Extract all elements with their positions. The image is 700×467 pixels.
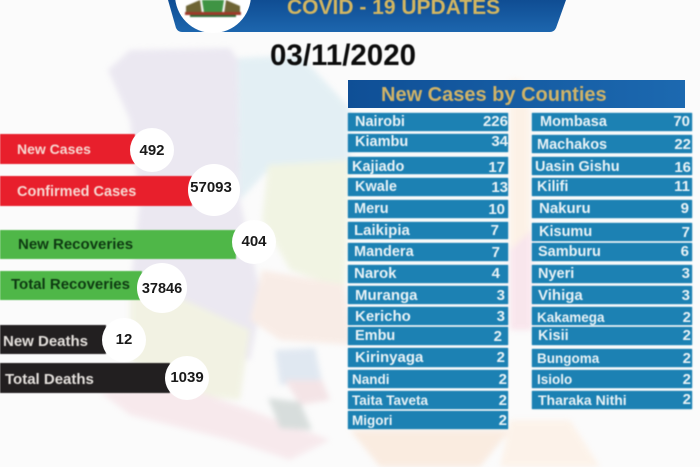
row: Nandi: Nandi <box>352 372 390 387</box>
header banner <box>168 0 566 32</box>
new deaths value <box>102 318 146 362</box>
row: Machakos: 22 <box>674 136 691 153</box>
confirmed cases bar <box>0 176 192 206</box>
row: Kiambu <box>348 134 508 152</box>
row: Kericho: 3 <box>497 308 505 325</box>
row: Kilifi: 11 <box>674 178 690 195</box>
total recoveries value <box>137 263 187 313</box>
row: Nairobi <box>348 113 508 131</box>
row: Kisii: Kisii <box>538 328 569 344</box>
row: Nakuru <box>532 200 692 218</box>
row: Vihiga <box>532 286 692 304</box>
confirmed cases value <box>188 164 240 216</box>
row: Kajiado <box>348 157 508 174</box>
row: Migori: Migori <box>352 413 392 428</box>
new recoveries value: 404 <box>241 233 267 250</box>
total deaths value <box>165 356 209 400</box>
row: Kiambu: 34 <box>491 133 508 150</box>
total recoveries bar <box>0 271 142 300</box>
row: Samburu <box>532 243 692 261</box>
row: Muranga: Muranga <box>355 287 418 304</box>
row: Nyeri <box>532 265 692 283</box>
row: Nairobi: 226 <box>483 113 508 130</box>
row: Isiolo: 2 <box>683 371 691 388</box>
row: Kisii: 2 <box>683 327 691 344</box>
row: Laikipia <box>348 222 508 239</box>
row: Kirinyaga <box>348 348 508 367</box>
row: Muranga: 3 <box>497 287 505 304</box>
row: Narok: Narok <box>354 265 397 282</box>
total recoveries value: 37846 <box>142 281 182 297</box>
row: Kajiado: 17 <box>488 159 505 176</box>
new cases value <box>130 128 174 172</box>
new deaths bar: New Deaths <box>3 333 88 350</box>
row: Mombasa <box>532 113 692 131</box>
panel: summary statistics <box>0 128 276 400</box>
row: Mombasa: 70 <box>673 113 690 130</box>
row: Kwale: Kwale <box>355 179 397 195</box>
row: Nairobi: Nairobi <box>355 114 405 130</box>
new cases bar <box>0 134 135 164</box>
row: Nandi: 2 <box>499 371 507 388</box>
row: Narok: 4 <box>492 265 500 282</box>
row: Mandera: 7 <box>492 244 500 261</box>
row: Kericho: Kericho <box>355 308 411 325</box>
new cases bar: New Cases <box>17 141 91 157</box>
row: Kisumu <box>532 223 692 241</box>
row: Kirinyaga: 2 <box>497 349 505 366</box>
row: Kiambu: Kiambu <box>355 134 408 150</box>
row: Machakos: Machakos <box>537 137 607 153</box>
new deaths bar <box>0 325 106 354</box>
icon: coat of arms crest <box>175 0 251 32</box>
row: Kakamega: Kakamega <box>537 310 605 325</box>
row: Taita Taveta <box>348 391 508 409</box>
row: Nakuru: 9 <box>681 200 689 217</box>
row: Migori <box>348 411 508 429</box>
row: Mandera: Mandera <box>354 244 414 260</box>
row: Mandera <box>348 243 508 261</box>
row: Taita Taveta: 2 <box>499 392 507 409</box>
row: Uasin Gishu <box>532 157 692 175</box>
row: Nyeri: 3 <box>682 265 690 282</box>
row: Meru: Meru <box>354 201 389 217</box>
row: Kwale <box>348 178 508 196</box>
row: Laikipia: Laikipia <box>354 222 410 239</box>
panel: new cases by counties heading: New Cases by Counties <box>381 84 607 106</box>
row: Samburu: 6 <box>681 243 689 260</box>
row: Tharaka Nithi: 2 <box>683 391 691 408</box>
row: Kakamega: 2 <box>683 309 691 326</box>
row: Nakuru: Nakuru <box>539 200 591 217</box>
row: Embu: 2 <box>494 328 502 345</box>
row: Laikipia: 7 <box>491 222 499 239</box>
row: Vihiga: Vihiga <box>538 287 583 304</box>
row: Kisumu: Kisumu <box>539 224 592 240</box>
total deaths bar <box>0 363 170 393</box>
row: Kakamega <box>532 307 692 325</box>
new recoveries bar: New Recoveries <box>18 236 133 253</box>
row: Embu: Embu <box>355 328 395 344</box>
new recoveries value <box>232 220 276 264</box>
panel: new cases by counties heading <box>348 80 685 108</box>
row: Embu <box>348 327 508 345</box>
row: Kwale: 13 <box>491 179 508 196</box>
row: Taita Taveta: Taita Taveta <box>352 393 428 408</box>
row: Uasin Gishu: Uasin Gishu <box>535 159 620 175</box>
row: Nandi <box>348 370 508 388</box>
row: Meru <box>348 200 508 218</box>
new deaths value: 12 <box>116 331 132 348</box>
row: Kirinyaga: Kirinyaga <box>355 349 423 366</box>
row: Bungoma: Bungoma <box>537 351 599 366</box>
panel: county table right column <box>530 112 694 410</box>
row: Migori: 2 <box>499 412 507 429</box>
row: Muranga <box>348 286 508 304</box>
row: Kilifi <box>532 178 692 196</box>
row: Mombasa: Mombasa <box>540 114 607 130</box>
total deaths value: 1039 <box>170 369 204 386</box>
row: Tharaka Nithi: Tharaka Nithi <box>538 392 627 408</box>
row: Kilifi: Kilifi <box>537 179 568 195</box>
confirmed cases value: 57093 <box>190 179 232 196</box>
confirmed cases bar: Confirmed Cases <box>17 184 136 200</box>
row: Vihiga: 3 <box>682 287 690 304</box>
row: Bungoma: 2 <box>683 350 691 367</box>
row: Kisumu: 7 <box>682 224 690 241</box>
row: Kericho <box>348 307 508 325</box>
total recoveries bar: Total Recoveries <box>11 276 130 293</box>
row: Isiolo: Isiolo <box>537 372 572 387</box>
row: Samburu: Samburu <box>538 244 601 260</box>
row: Bungoma <box>532 349 692 367</box>
new recoveries bar <box>0 230 236 259</box>
row: Narok <box>348 265 508 283</box>
row: Nyeri: Nyeri <box>538 266 574 282</box>
total deaths bar: Total Deaths <box>5 371 94 388</box>
row: Tharaka Nithi <box>532 391 692 409</box>
row: Kisii <box>532 327 692 345</box>
row: Machakos <box>532 135 692 153</box>
row: Uasin Gishu: 16 <box>674 159 691 176</box>
new cases value: 492 <box>139 142 165 159</box>
row: Meru: 10 <box>488 201 505 218</box>
row: Isiolo <box>532 370 692 388</box>
row: Kajiado: Kajiado <box>352 159 404 175</box>
date heading: 03/11/2020 <box>270 39 416 72</box>
panel: county table left column <box>346 112 510 430</box>
